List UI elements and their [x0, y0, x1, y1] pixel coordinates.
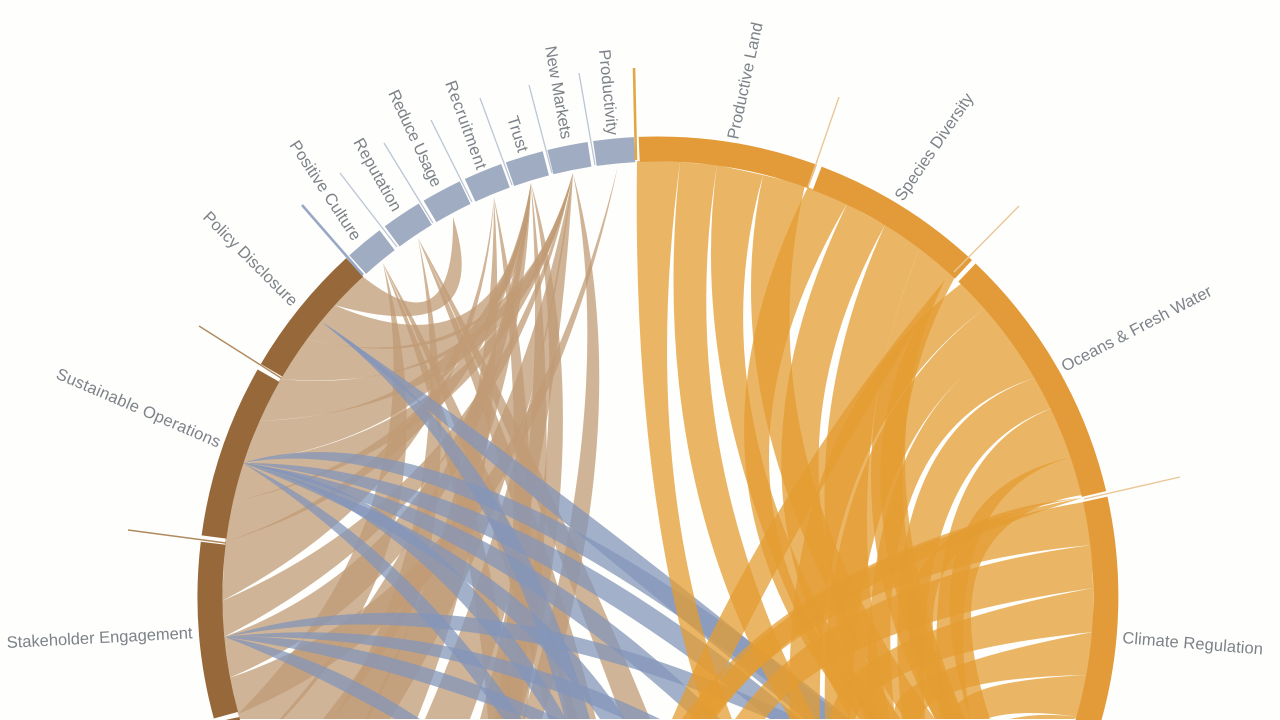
label: Sustainable Operations: Sustainable Operations	[53, 365, 223, 451]
tick lines: segment separators	[128, 68, 1180, 543]
label: Oceans & Fresh Water: Oceans & Fresh Water	[1059, 282, 1215, 376]
outer ring: orange segments	[639, 149, 1118, 720]
label: Reputation: Reputation	[350, 135, 405, 215]
label: Positive Culture: Positive Culture	[286, 137, 365, 244]
label: Species Diversity: Species Diversity	[891, 89, 978, 204]
label: Trust: Trust	[503, 114, 532, 155]
outer ring: blue segments	[358, 150, 635, 265]
label: Productive Land: Productive Land	[724, 21, 767, 141]
label: New Markets: New Markets	[541, 45, 575, 140]
label: Productivity: Productivity	[595, 49, 621, 137]
label: Policy Disclosure: Policy Disclosure	[199, 208, 301, 310]
label: Recruitment: Recruitment	[441, 78, 490, 172]
label: Reduce Usage: Reduce Usage	[384, 87, 445, 190]
label: Stakeholder Engagement: Stakeholder Engagement	[6, 624, 193, 652]
outer ring: brown segments	[210, 267, 355, 720]
orange chords from natural capital	[637, 161, 1093, 719]
label: Climate Regulation: Climate Regulation	[1122, 629, 1264, 659]
brown chords: business practices to business value	[222, 166, 650, 719]
blue chords fanning from practice tips	[225, 322, 850, 719]
